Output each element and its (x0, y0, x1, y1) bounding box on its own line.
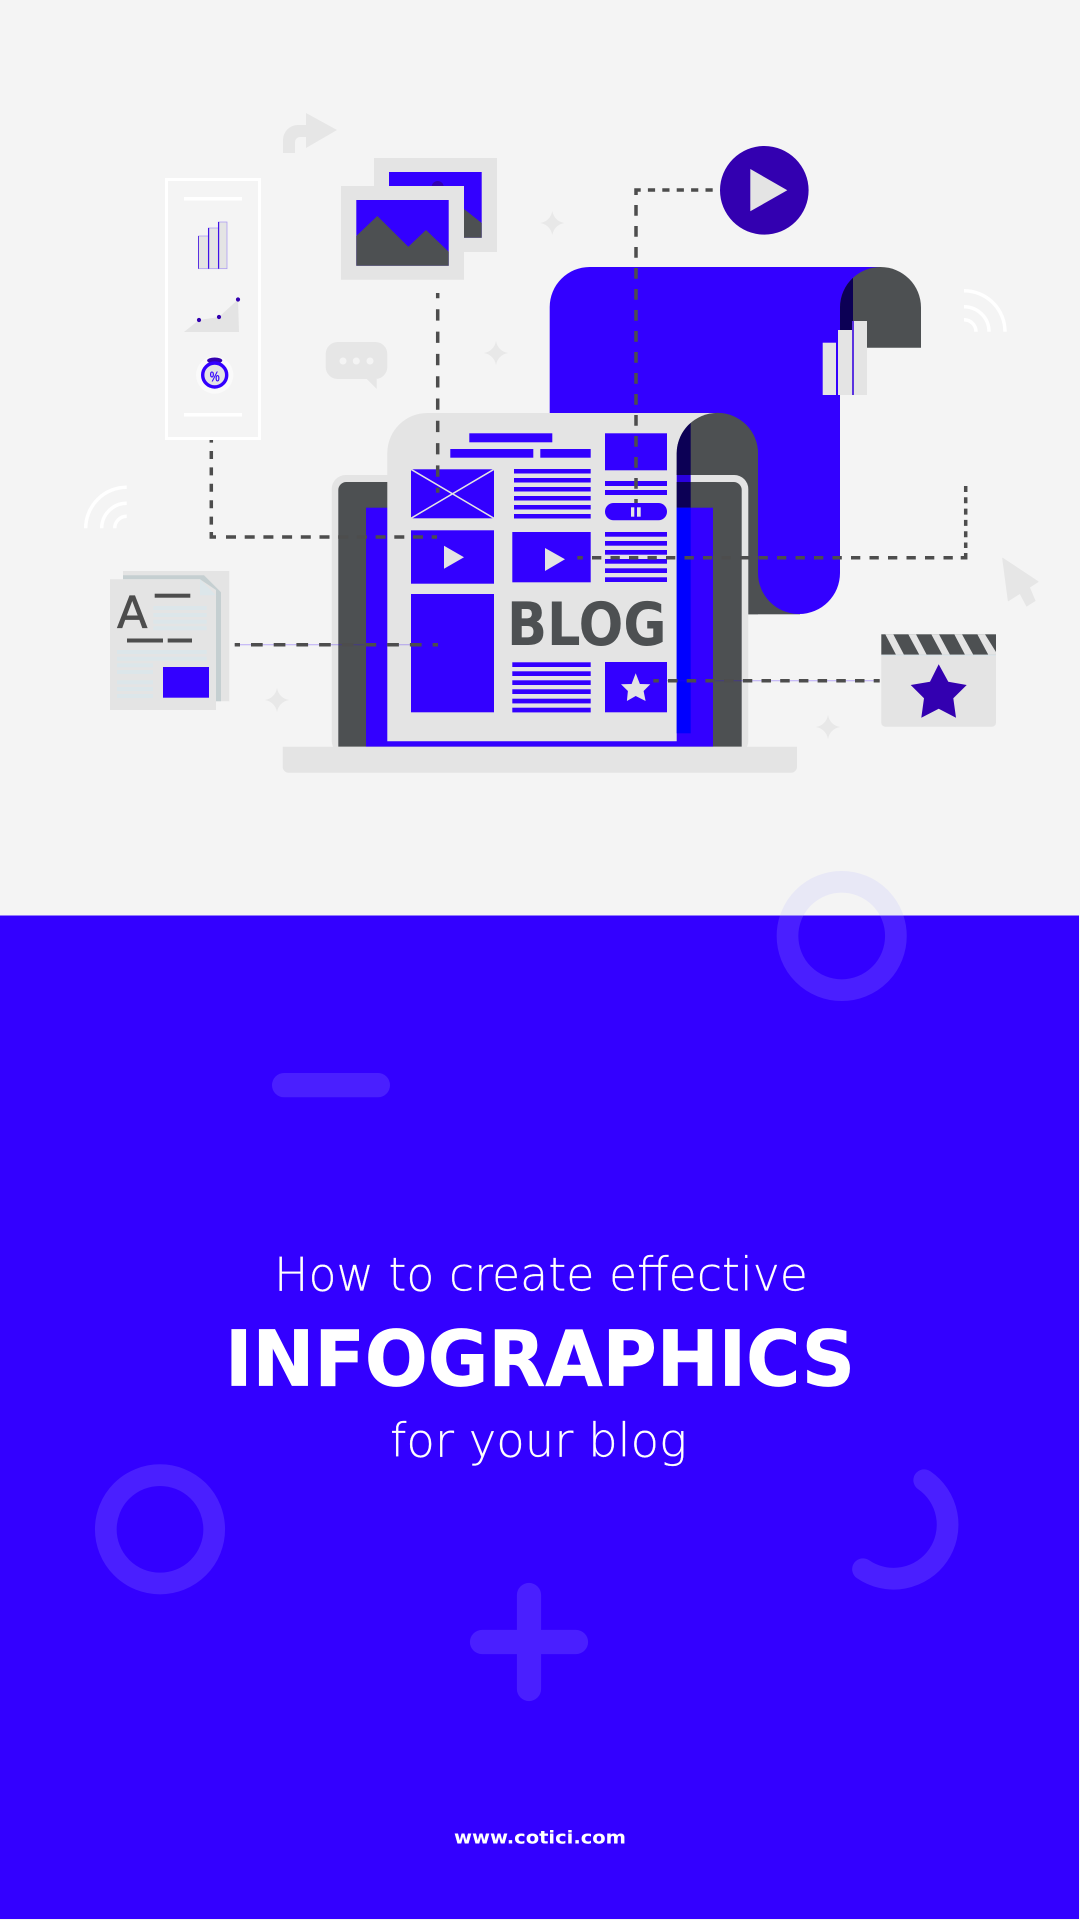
connector: stats card vertical (210, 440, 213, 525)
icon: document (110, 571, 229, 710)
icon: back photo (374, 158, 497, 252)
envelope image placeholder (411, 469, 494, 518)
laptop base (283, 747, 797, 773)
text lines block 2 (605, 532, 667, 582)
scroll curl top (840, 267, 921, 348)
document image block (163, 667, 209, 698)
sparkles (265, 211, 840, 739)
percent dial icon (196, 356, 233, 394)
connector corner right (961, 553, 966, 558)
large image block (411, 594, 494, 712)
top right ad box (605, 433, 667, 470)
website url: www.cotici.com (454, 1828, 626, 1848)
panel: stats card (166, 180, 260, 438)
title: INFOGRAPHICS: INFOGRAPHICS (225, 1316, 855, 1405)
connector: play button horizontal (641, 188, 713, 192)
title: How to create effective: How to create effective (274, 1248, 808, 1302)
decorative ring: top right (788, 882, 896, 990)
mini bars on scroll (823, 321, 867, 395)
letter A: A (117, 588, 148, 639)
percent dial icon: % (210, 368, 220, 386)
short lines (605, 481, 667, 495)
connector: star to clapper (653, 679, 880, 682)
decorative arc (863, 1480, 948, 1579)
page header bars (450, 433, 591, 458)
connector: document to page guide (235, 644, 438, 646)
icon: wifi right (964, 291, 1005, 332)
bar chart icon (198, 222, 227, 269)
icon: play button (720, 146, 809, 235)
title: for your blog: for your blog (390, 1414, 687, 1468)
decorative pill (272, 1073, 390, 1097)
decorative ring: bottom left (106, 1475, 214, 1584)
connector: play corner (636, 190, 641, 195)
connector: stats card corner (211, 532, 216, 537)
laptop (283, 475, 797, 773)
icon: front photo (341, 186, 464, 280)
BLOG heading: BLOG (507, 591, 666, 660)
connector vertical right (964, 486, 967, 548)
icon: speech bubble (326, 342, 387, 389)
page curl body (677, 413, 758, 614)
panel: blog page (387, 413, 758, 741)
blue scroll sheet (550, 267, 921, 614)
connector: star to clapper guide (653, 680, 880, 682)
page curl top (677, 413, 758, 733)
icon: wifi left (86, 487, 127, 528)
document dark lines (127, 594, 192, 642)
connector: play vertical (634, 205, 638, 503)
text lines block 1 (514, 469, 591, 518)
clapper star (911, 664, 967, 718)
star box (605, 662, 667, 712)
connector: photo to page (436, 293, 439, 493)
area chart icon (184, 297, 240, 332)
icon: share arrow (283, 113, 337, 153)
pause button (605, 503, 667, 520)
connector: document to page (235, 643, 438, 646)
connector: video to wifi (577, 556, 961, 559)
decorative plus (482, 1595, 576, 1689)
video box 1 (411, 530, 494, 584)
icon: clapperboard (881, 634, 996, 727)
text lines block 3 (512, 662, 591, 712)
connector: stats card horizontal (226, 535, 437, 539)
document light lines (117, 606, 207, 698)
icon: cursor (1003, 558, 1038, 606)
video box 2 (512, 532, 591, 582)
